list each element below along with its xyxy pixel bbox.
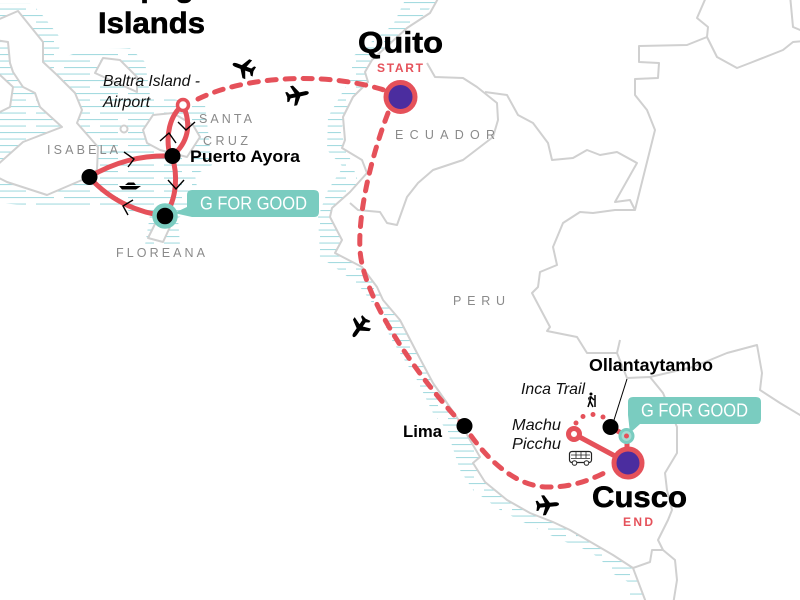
label: Start: START [377, 61, 424, 75]
Inca Trail dotted path [574, 412, 606, 426]
label: Baltra Island Airport: Airport [102, 94, 151, 111]
label: Ollantaytambo: Ollantaytambo [589, 355, 713, 375]
icon: plane upper right [284, 83, 311, 107]
marker: Floreana G for Good [154, 206, 176, 226]
label: Santa Cruz: SANTA [199, 112, 253, 126]
label: Cusco: Cusco [592, 481, 687, 514]
marker: Cusco end [614, 449, 642, 477]
marker: Ollantaytambo [602, 419, 618, 435]
flight route: Baltra to Quito [198, 78, 384, 99]
label: Baltra Island Airport [102, 73, 200, 111]
label: Floreana: FLOREANA [116, 246, 206, 260]
route: Machu Picchu to Cusco [574, 434, 628, 463]
marker: Quito start [386, 82, 415, 112]
icon: hiker [588, 392, 595, 407]
label: Baltra Island Airport: Baltra Island - [103, 73, 200, 90]
title: Galápagos Islands: Islands [98, 7, 205, 40]
badge: G for Good Cusco: G FOR GOOD [641, 400, 748, 420]
marker: Isabela [82, 169, 98, 185]
label: End: END [623, 515, 653, 529]
label: Santa Cruz: CRUZ [203, 134, 248, 148]
label: Machu Picchu [512, 417, 561, 453]
label: Quito: Quito [358, 26, 443, 60]
badge: G for Good Galápagos: G FOR GOOD [200, 194, 307, 214]
marker: Puerto Ayora [164, 148, 180, 164]
direction chevrons [123, 122, 195, 215]
marker: Cusco G for Good [620, 430, 633, 442]
badge: G for Good Cusco [628, 397, 761, 433]
title: Galápagos Islands [75, 0, 229, 40]
label: Puerto Ayora: Puerto Ayora [190, 147, 301, 166]
icon: plane over the Pacific [345, 312, 375, 343]
label: Ecuador: ECUADOR [395, 128, 495, 142]
label: Machu Picchu: Picchu [512, 436, 561, 453]
icon: plane near Cusco [535, 494, 560, 516]
icon: plane upper left [229, 54, 258, 81]
country borders [350, 0, 800, 600]
label: Lima: Lima [403, 422, 443, 441]
route: Ollantaytambo to Cusco [610, 427, 627, 463]
marker: Lima [456, 418, 472, 434]
label: Isabela: ISABELA [47, 143, 119, 157]
Galápagos route loop [89, 105, 188, 216]
marker: Machu Picchu [568, 428, 580, 440]
label: Peru: PERU [453, 294, 505, 308]
label: Machu Picchu: Machu [512, 417, 561, 434]
leader line to Ollantaytambo [614, 379, 627, 420]
land: Galápagos islands [0, 11, 200, 242]
label: Inca Trail: Inca Trail [521, 381, 585, 398]
icon: bus [570, 452, 592, 465]
icon: boat [119, 182, 141, 190]
land: South America mainland [330, 0, 800, 600]
flight route: Quito to Lima and Cusco [360, 113, 610, 487]
label: Santa Cruz [199, 112, 253, 148]
marker: Baltra Island [178, 100, 188, 110]
badge: G for Good Galápagos [174, 190, 319, 217]
